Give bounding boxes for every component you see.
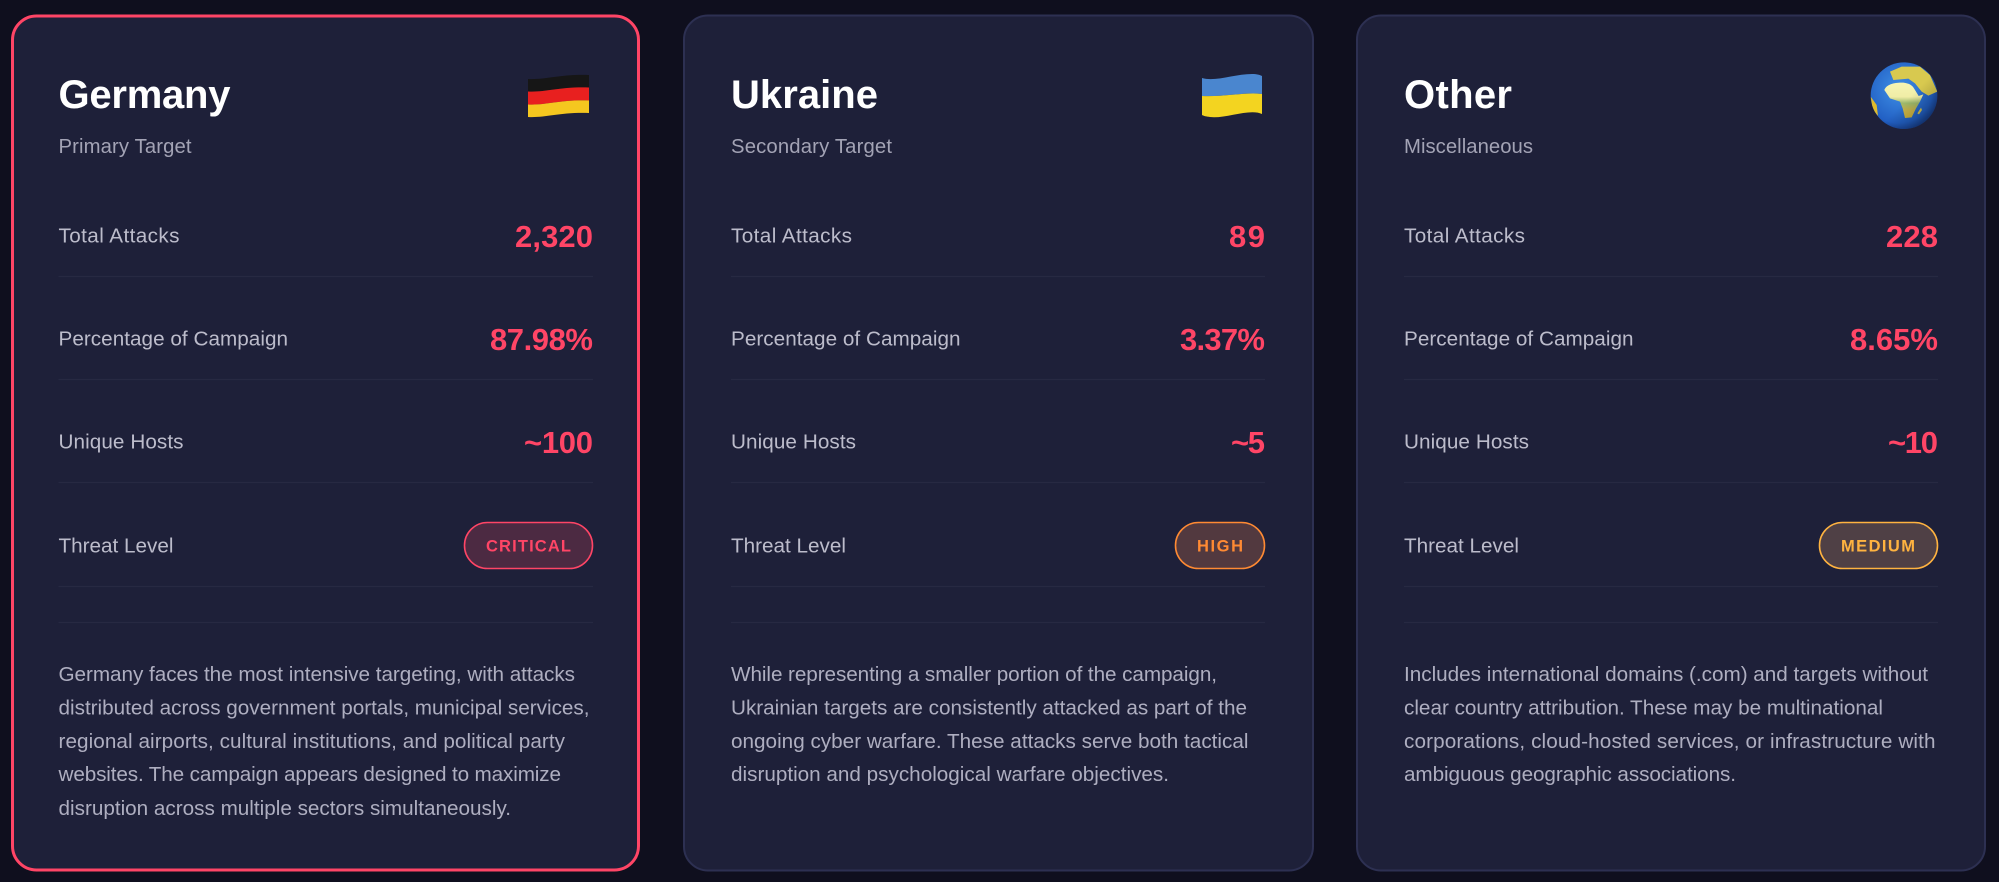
stat: Total Attacks: Total Attacks	[731, 224, 852, 248]
description: Ukraine	[731, 663, 1248, 786]
description: Other: corporations, cloud-hosted services, or infrastructure with	[1404, 730, 1936, 753]
stat: Total Attacks	[58, 219, 593, 254]
stat: Unique Hosts: Unique Hosts	[58, 430, 184, 454]
stat: Threat Level	[58, 522, 592, 568]
description: Other: clear country attribution. These may be multinational	[1404, 696, 1883, 720]
stat: Percentage of Campaign	[1404, 322, 1938, 357]
description: Other: ambiguous geographic associations.	[1404, 763, 1736, 786]
stat: Unique Hosts	[58, 425, 593, 460]
panel: Ukraine	[684, 16, 1313, 870]
icon: globe	[1871, 62, 1937, 129]
badge: MEDIUM	[1820, 522, 1938, 568]
icon: German flag	[528, 75, 589, 117]
badge: MEDIUM: MEDIUM	[1841, 538, 1915, 556]
stat: Unique Hosts: Unique Hosts	[731, 430, 856, 454]
stat: Total Attacks	[1404, 219, 1938, 254]
description: Ukraine: While representing a smaller portion of the campaign,	[731, 663, 1217, 686]
stat: Total Attacks: 2,320	[515, 219, 593, 254]
stat: Unique Hosts: ~100	[524, 425, 593, 460]
badge: HIGH	[1176, 522, 1264, 568]
stat: Total Attacks: Total Attacks	[1404, 224, 1525, 248]
stat: Threat Level: Threat Level	[1404, 534, 1519, 558]
stat: Percentage of Campaign: 3.37%	[1180, 322, 1265, 357]
description: Other	[1404, 663, 1936, 786]
description: Germany	[58, 663, 590, 820]
stat: Total Attacks	[731, 219, 1265, 254]
heading: Germany: Germany	[58, 73, 231, 117]
subtitle: Miscellaneous: Miscellaneous	[1404, 136, 1533, 158]
description: Ukraine: Ukrainian targets are consistently attacked as part of the	[731, 696, 1247, 720]
stat: Total Attacks: 228	[1886, 219, 1938, 254]
icon: Ukrainian flag	[1202, 74, 1262, 117]
subtitle: Primary Target: Primary Target	[58, 136, 192, 158]
description: Ukraine: ongoing cyber warfare. These attacks serve both tactical	[731, 730, 1248, 753]
stat: Threat Level: Threat Level	[731, 534, 846, 558]
description: Germany: disruption across multiple sectors simultaneously.	[58, 797, 511, 820]
description: Germany: regional airports, cultural institutions, and political party	[58, 730, 566, 753]
heading: Ukraine: Ukraine	[731, 73, 878, 117]
stat: Threat Level	[731, 522, 1264, 568]
badge: HIGH: HIGH	[1197, 538, 1243, 556]
description: Ukraine: disruption and psychological warfare objectives.	[731, 763, 1169, 786]
description: Germany: websites. The campaign appears designed to maximize	[58, 763, 561, 786]
stat: Threat Level: Threat Level	[58, 534, 174, 558]
stat: Unique Hosts	[1404, 425, 1938, 460]
badge: CRITICAL	[464, 522, 592, 568]
stat: Percentage of Campaign: 87.98%	[490, 322, 593, 357]
description: Other: Includes international domains (.com) and targets without	[1404, 663, 1928, 686]
description: Germany: distributed across government portals, municipal services,	[58, 696, 590, 720]
stat: Threat Level	[1404, 522, 1938, 568]
stat: Percentage of Campaign: Percentage of Campaign	[731, 328, 960, 350]
stat: Percentage of Campaign: Percentage of Campaign	[1404, 328, 1634, 350]
stat: Percentage of Campaign	[58, 322, 593, 357]
panel: Germany	[12, 16, 638, 870]
stat: Unique Hosts: ~5	[1231, 425, 1265, 460]
stat: Total Attacks: Total Attacks	[58, 224, 180, 248]
stat: Percentage of Campaign	[731, 322, 1265, 357]
stat: Percentage of Campaign: 8.65%	[1850, 322, 1938, 357]
stat: Total Attacks: 89	[1229, 219, 1265, 254]
stat: Unique Hosts: Unique Hosts	[1404, 430, 1529, 454]
stat: Unique Hosts	[731, 425, 1265, 460]
stat: Percentage of Campaign: Percentage of Campaign	[58, 328, 288, 350]
panel: Other	[1357, 16, 1985, 870]
heading: Other: Other	[1404, 73, 1512, 117]
stat: Unique Hosts: ~10	[1888, 425, 1938, 460]
description: Germany: Germany faces the most intensive targeting, with attacks	[58, 663, 575, 686]
badge: CRITICAL: CRITICAL	[486, 538, 571, 556]
subtitle: Secondary Target: Secondary Target	[731, 136, 892, 158]
